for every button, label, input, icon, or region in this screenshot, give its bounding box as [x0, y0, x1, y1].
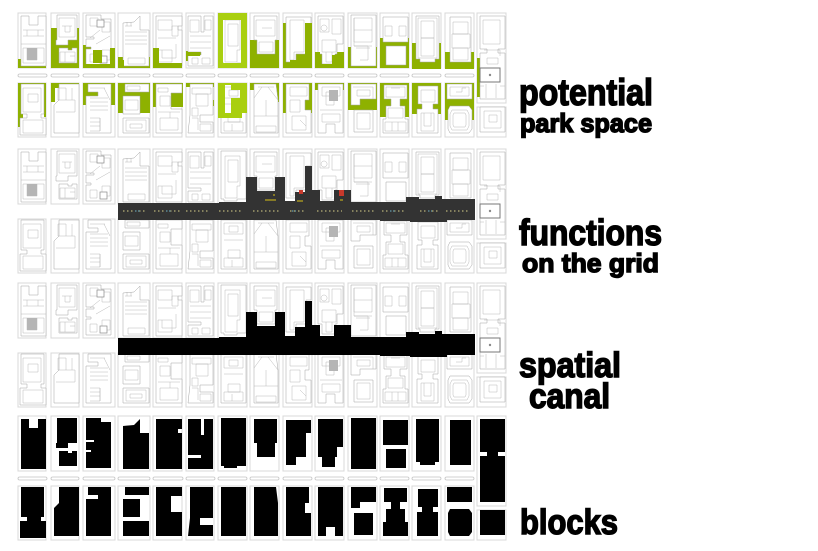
heading: potential park space: park space: [520, 108, 652, 138]
black canal silhouette: [118, 301, 475, 357]
building plans: [20, 15, 505, 135]
panel: functions on the grid: [18, 149, 506, 273]
heading: functions on the grid: functions: [519, 212, 662, 253]
green park areas: [18, 23, 481, 127]
light green park block, top: [218, 13, 247, 68]
green patches over plans: [83, 23, 344, 68]
heading: functions on the grid: on the grid: [522, 248, 659, 278]
panel: potential park space: [18, 13, 506, 137]
heading: blocks: blocks: [520, 503, 618, 542]
black block footprints: [20, 418, 505, 538]
heading: spatial canal: spatial: [519, 346, 621, 385]
heading: potential park space: potential: [519, 72, 653, 113]
dark function grid: [118, 166, 475, 222]
heading: spatial canal: canal: [529, 377, 610, 416]
light green park block, bottom: [218, 83, 247, 118]
function markers: [123, 190, 470, 211]
panel: blocks: [18, 416, 506, 540]
heading: potential park space: [519, 72, 653, 138]
panel: spatial canal: [18, 283, 506, 407]
heading: spatial canal: [519, 346, 621, 416]
heading: functions on the grid: [519, 212, 662, 278]
